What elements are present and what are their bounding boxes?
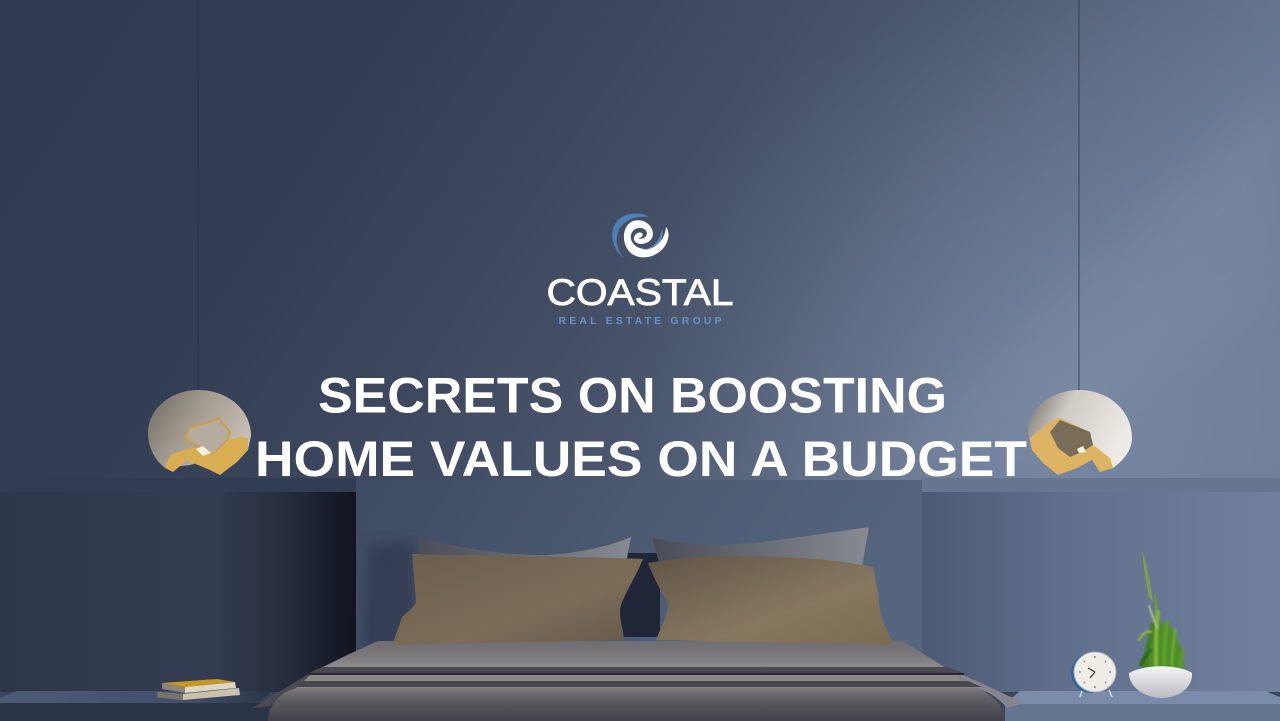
title [255, 368, 1027, 487]
sheet fold: right tip [948, 668, 1024, 708]
nightstand: left [0, 691, 272, 721]
icon: potted plant [1129, 550, 1192, 698]
sheet stripe: lower [296, 681, 982, 687]
icon: alarm clock [1071, 652, 1116, 697]
lamp: right [1028, 390, 1132, 475]
background wall [0, 0, 1280, 490]
sheet fold: left tip [253, 668, 318, 708]
icon: wave swirl [612, 213, 669, 258]
sheet stripe: upper [306, 667, 968, 675]
wordmark: COASTAL [546, 271, 734, 313]
logo [546, 213, 734, 327]
shadow between pillows [616, 553, 660, 637]
shelf: right [922, 478, 1280, 492]
lamp: left [148, 390, 251, 475]
lower wall panel: right [922, 490, 1280, 692]
nightstand: right [1005, 691, 1280, 721]
icon: books [157, 679, 240, 700]
shelf: left [0, 478, 356, 492]
back pillows [418, 527, 869, 566]
pillow shadow on headboard [362, 540, 415, 650]
bed [253, 641, 1024, 721]
tagline: REAL ESTATE GROUP [558, 315, 722, 327]
front pillows [393, 554, 894, 645]
title: SECRETS ON BOOSTING [318, 368, 947, 424]
lower wall panel: left [0, 490, 356, 692]
title: HOME VALUES ON A BUDGET [255, 431, 1027, 487]
headboard [356, 480, 922, 655]
